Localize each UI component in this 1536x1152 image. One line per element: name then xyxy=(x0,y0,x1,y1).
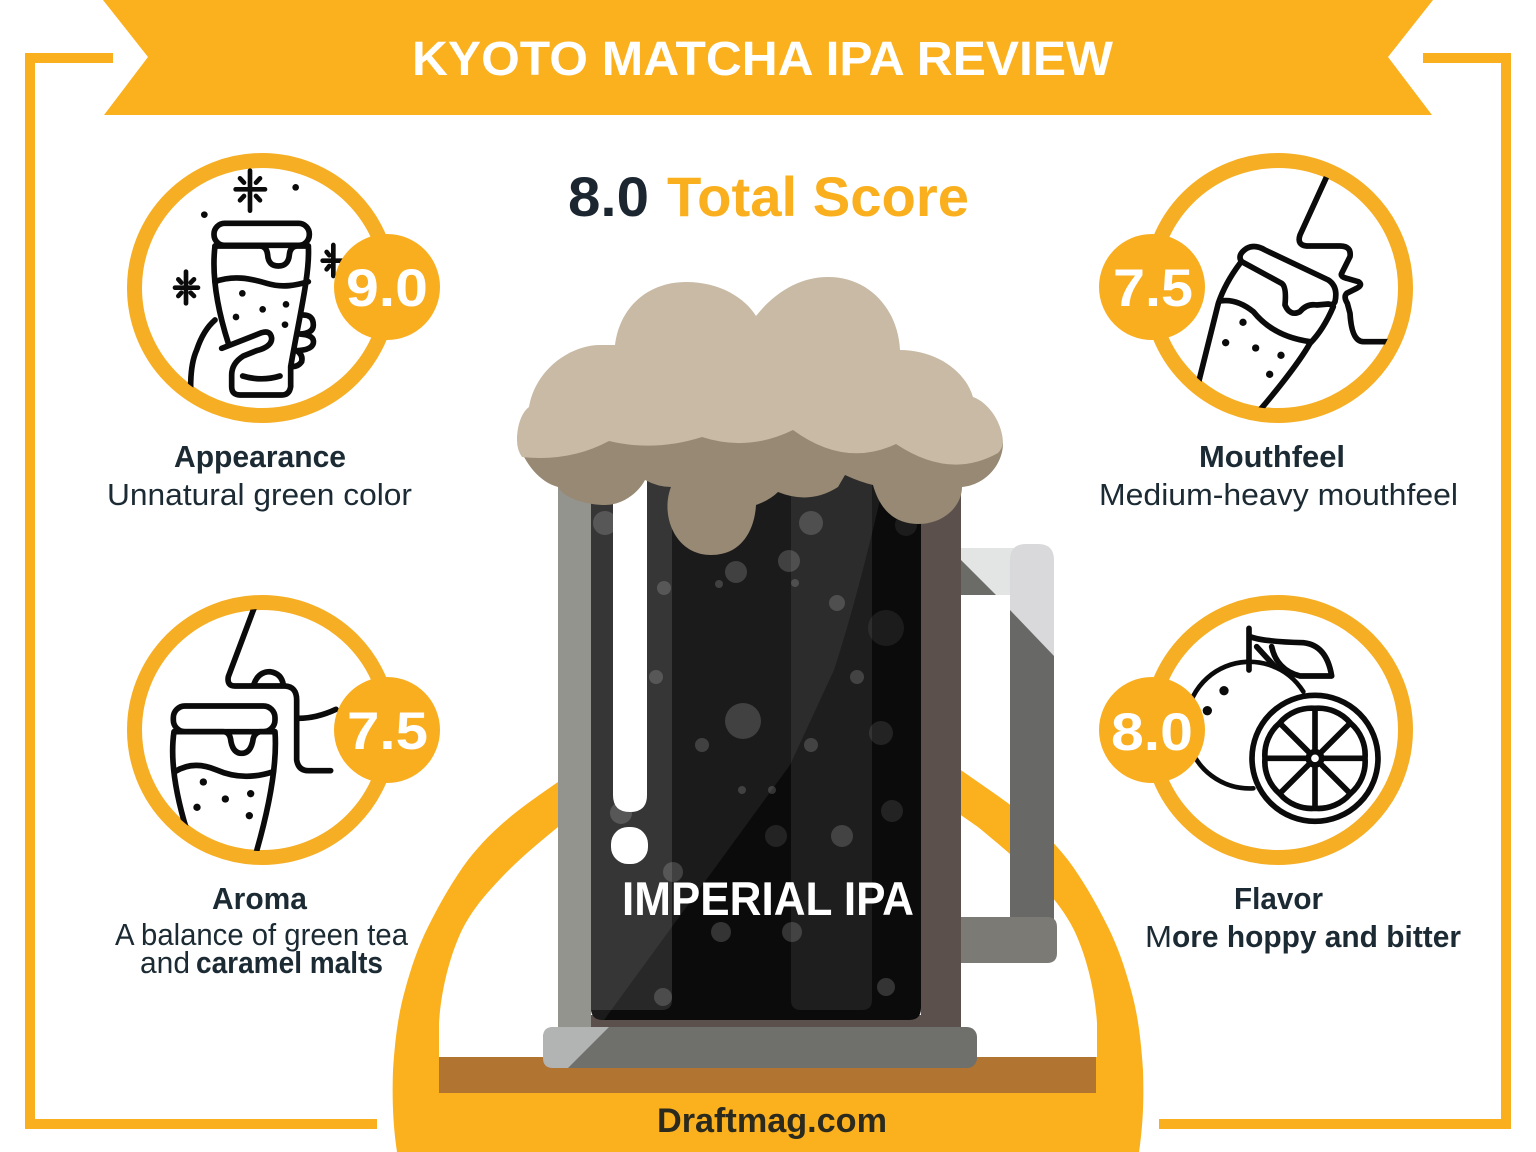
score badge: 9.0 xyxy=(346,259,428,318)
foam xyxy=(517,277,1003,555)
icon: citrus fruit xyxy=(1186,628,1378,821)
label: Medium-heavy mouthfeel xyxy=(1099,477,1458,512)
title banner xyxy=(103,0,1433,115)
label xyxy=(1145,881,1461,954)
label: ore hoppy and bitter xyxy=(1172,919,1461,954)
mug handle xyxy=(955,544,1057,963)
score badge: 7.5 xyxy=(347,702,428,761)
label: and xyxy=(140,945,190,980)
ring xyxy=(134,160,390,416)
label xyxy=(1099,439,1458,512)
label: Unnatural green color xyxy=(107,477,412,512)
icon: glass at lips xyxy=(1198,177,1388,410)
label: caramel malts xyxy=(196,945,383,980)
icon: beer glass in hand xyxy=(175,171,343,395)
panel: aroma xyxy=(115,602,440,980)
label: Flavor xyxy=(1234,881,1323,916)
white glass highlights xyxy=(611,470,648,864)
score badge xyxy=(1099,677,1205,783)
label xyxy=(107,439,412,512)
panel: appearance xyxy=(107,160,440,512)
ring xyxy=(1150,602,1406,858)
bubbles xyxy=(593,511,917,1006)
ring xyxy=(134,602,390,858)
dark beer body xyxy=(591,465,921,1020)
label xyxy=(115,881,409,980)
icon: nose over glass xyxy=(173,608,336,857)
mug walls xyxy=(558,465,591,1030)
mug label: IMPERIAL IPA xyxy=(622,872,914,925)
label: Mouthfeel xyxy=(1199,439,1345,474)
beer mug xyxy=(517,277,1057,1068)
total score heading: 8.0 xyxy=(568,165,649,228)
mug base xyxy=(543,1027,977,1068)
total score heading: Total Score xyxy=(667,165,969,228)
label: Aroma xyxy=(212,881,308,916)
score badge xyxy=(334,677,440,783)
label: Appearance xyxy=(174,439,346,474)
score badge xyxy=(334,234,440,340)
score badge: 7.5 xyxy=(1113,259,1193,318)
score badge: 8.0 xyxy=(1111,703,1193,762)
label: M xyxy=(1145,919,1172,954)
yellow arch and floor behind mug xyxy=(393,636,1143,1152)
ring xyxy=(1150,160,1406,416)
panel: mouthfeel xyxy=(1099,160,1458,512)
score badge xyxy=(1099,234,1205,340)
label: A balance of green tea xyxy=(115,917,409,952)
title: KYOTO MATCHA IPA REVIEW xyxy=(412,33,1114,86)
panel: flavor xyxy=(1099,602,1461,954)
source credit: Draftmag.com xyxy=(657,1102,887,1140)
